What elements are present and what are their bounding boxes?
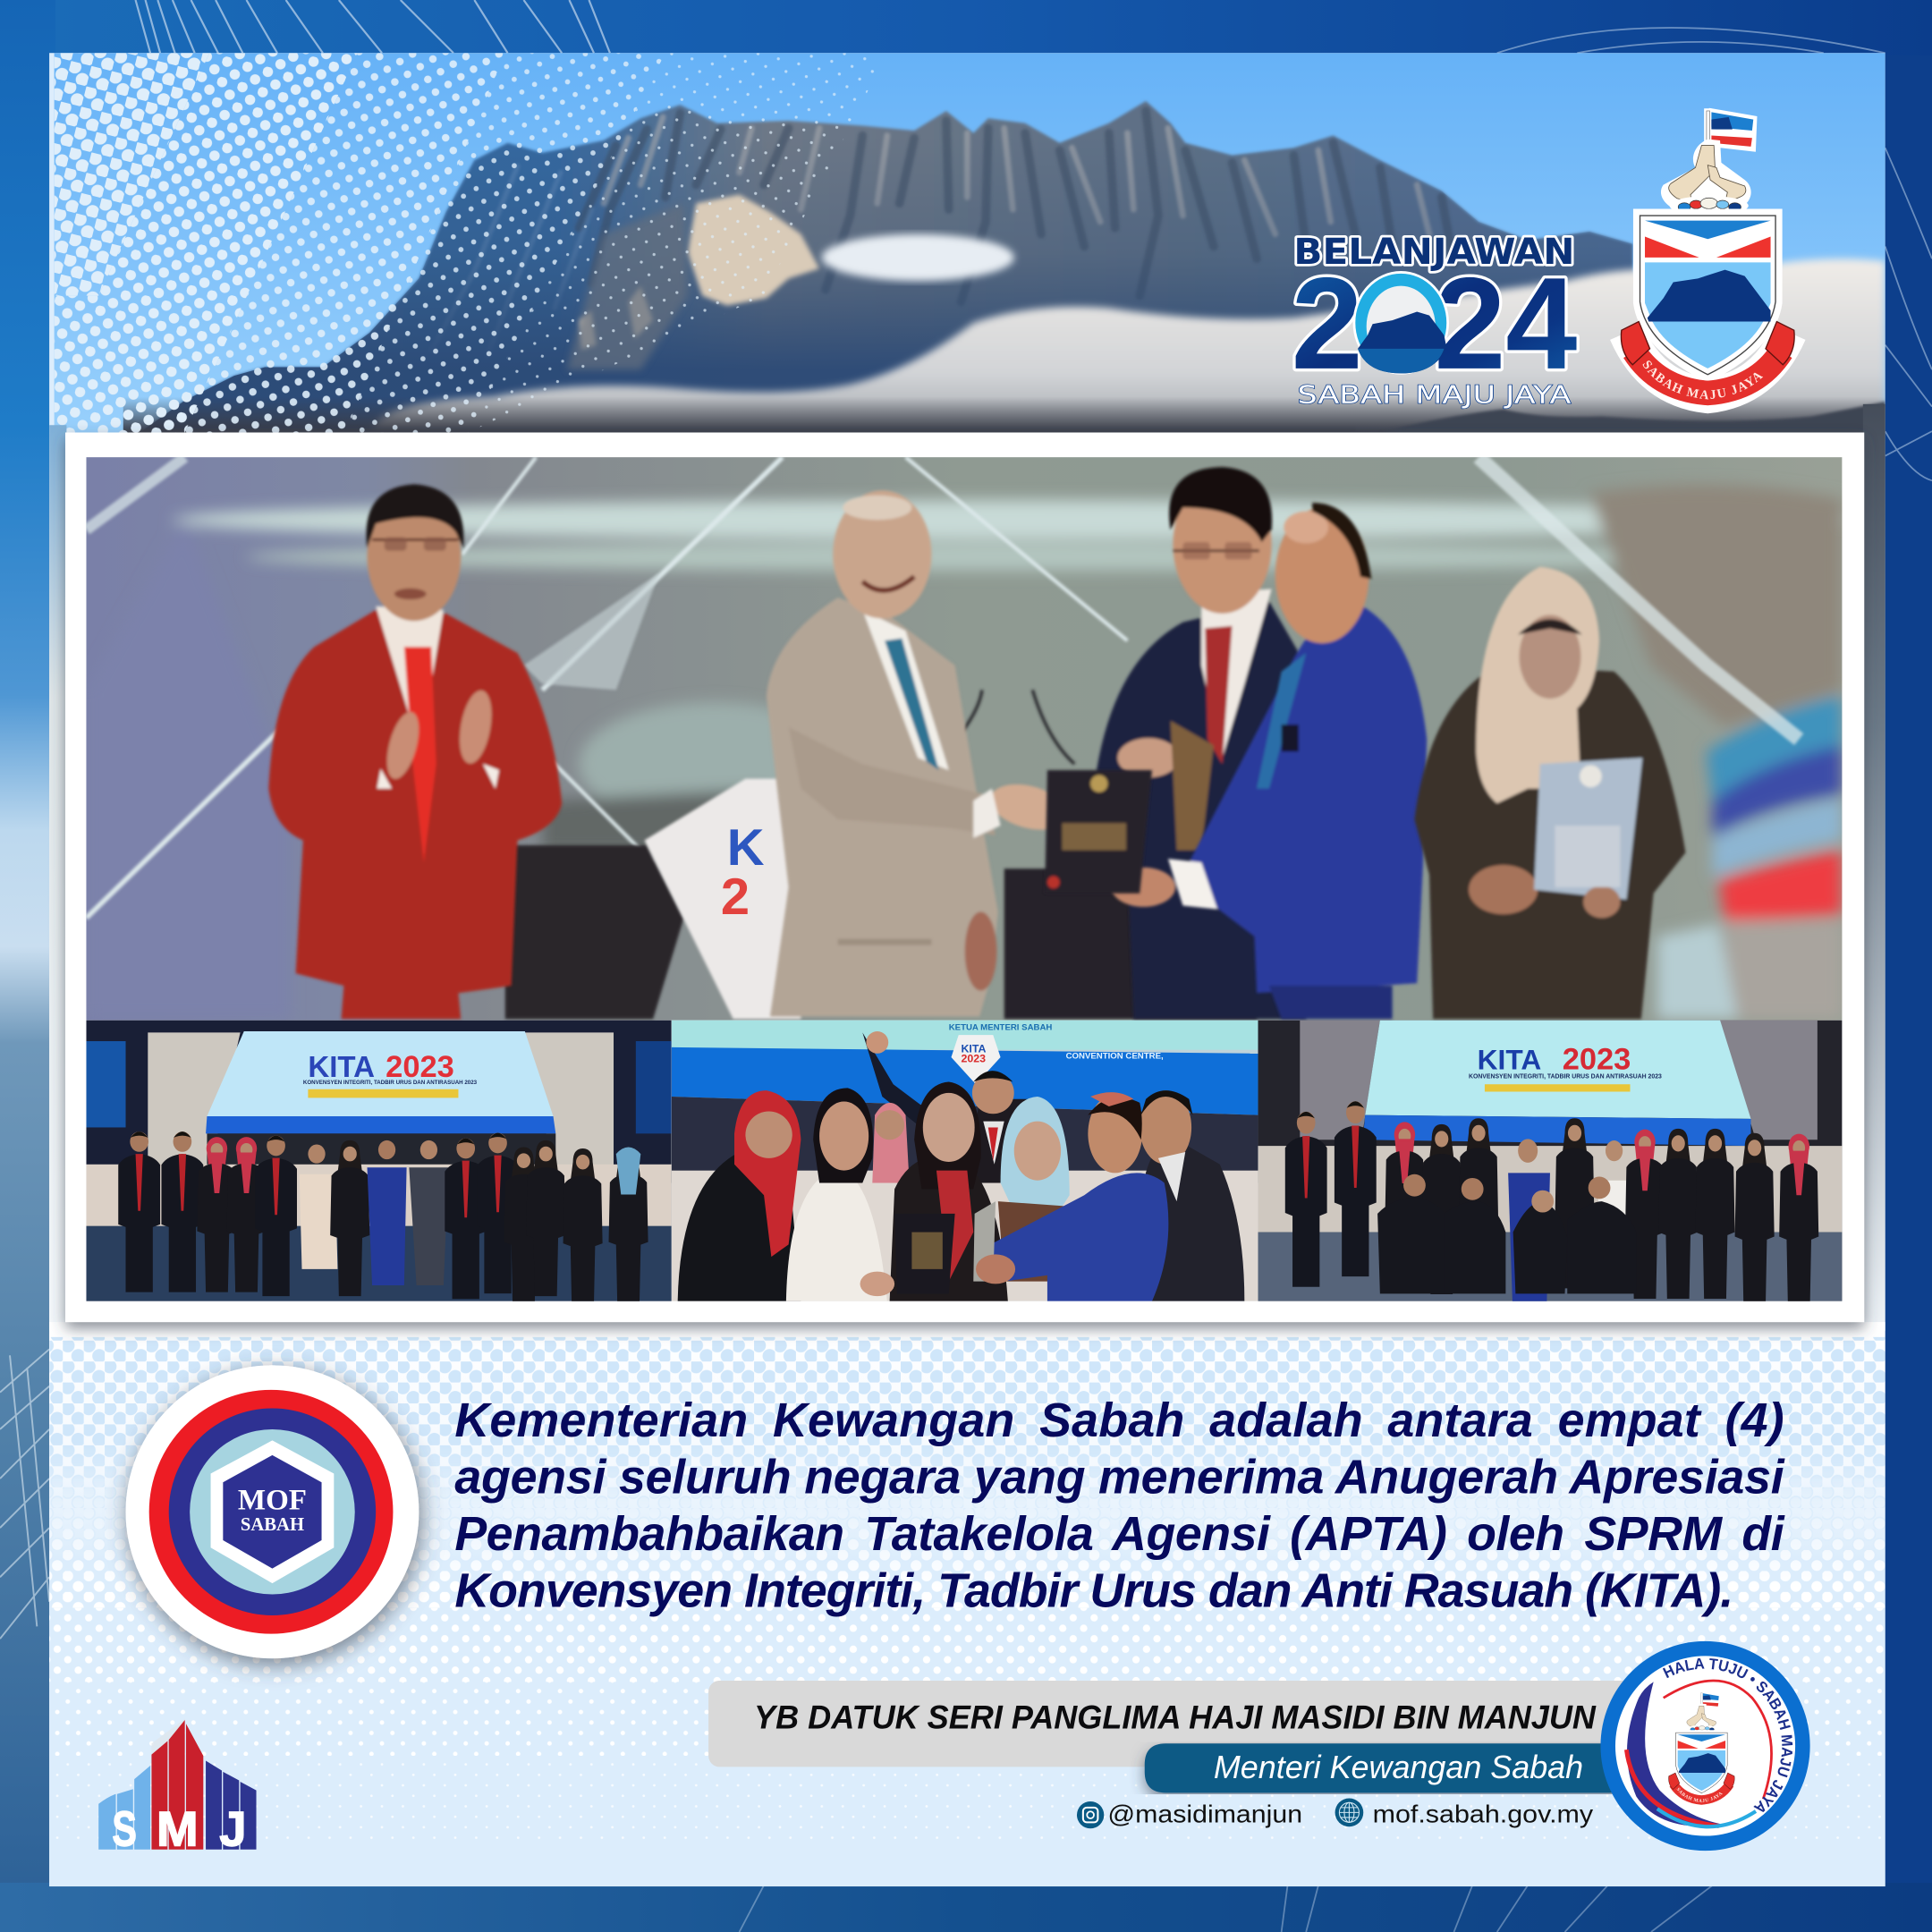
stage light beams [86,457,1799,918]
header photo: sky and Mount Kinabalu [49,53,1885,433]
person: woman in hijab [1414,567,1685,1019]
blue band [672,1047,1258,1115]
seal ring text: HALA TUJU • SABAH MAJU JAYA [1662,1658,1792,1812]
LED screen [1365,1021,1751,1119]
photo: award presentation on stage [86,457,1848,1021]
letters SMJ [112,1801,247,1857]
heading: BELANJAWAN: BELANJAWAN [1293,232,1575,273]
grey side panels [1300,1021,1818,1140]
person: man in dark suit [1097,467,1306,1019]
screen title: 2023 [386,1050,454,1084]
panel shard [523,573,659,690]
screen title: KONVENSYEN INTEGRITI, TADBIR URUS DAN ANTIRASUAH 2023 [1469,1073,1662,1080]
photo: large group on stage, right [1258,1021,1842,1321]
award plaque [1045,770,1152,894]
KITA mini sign: KITA [961,1042,987,1055]
letters SMJ: M [157,1801,199,1857]
floor [86,1165,672,1236]
screen title: 2023 [1563,1043,1631,1077]
right banner [636,1041,672,1133]
icon: MOF Sabah roundel: SABAH [241,1515,304,1535]
tagline: Sabah Maju Jaya: SABAH MAJU JAYA [1298,380,1572,409]
number: 2024: 2024 [1292,250,1577,396]
person: man in blue suit [1112,503,1427,1019]
social: website: mof.sabah.gov.my [1373,1800,1593,1827]
KITA mini sign: 2023 [961,1052,986,1064]
logo: Belanjawan 2024 [1292,232,1577,409]
person: man in red suit [268,484,562,1019]
halftone dots [55,53,887,433]
pale rock face [688,195,819,306]
logo text: MOF [238,1485,307,1517]
people close-up [678,1031,1244,1301]
screen title [1469,1043,1662,1092]
LED screen [207,1031,554,1116]
photo: close-up group with award [672,1021,1258,1301]
photo: group on stage, left [86,1021,672,1304]
stage backdrop [86,457,1848,1021]
logo: Hala Tuju Sabah Maju Jaya seal [1600,1640,1810,1852]
icon: MOF Sabah roundel [126,1365,419,1658]
text block: announcement paragraph: Konvensyen Integriti, Tadbir Urus dan Anti Rasuah (KITA). [454,1563,1733,1617]
seal crest [1669,1692,1734,1804]
role bar: Menteri Kewangan Sabah [1145,1743,1639,1792]
panel: lower background with halftone [49,1322,1885,1886]
low cloud band [123,258,1885,433]
front row crouching [1377,1174,1636,1293]
screen title [303,1050,478,1097]
screen title: KITA [308,1051,375,1084]
text block: announcement paragraph: Penambahbaikan Tatakelola Agensi (APTA) oleh SPRM di [454,1507,1785,1561]
panel: white photo frame [65,433,1864,1322]
icon: Sabah coat of arms [1621,108,1794,403]
role bar: Menteri Kewangan Sabah: Menteri Kewangan Sabah [1214,1750,1583,1785]
person: man in beige suit [767,490,1072,1016]
text block: announcement paragraph: Kementerian Kewangan Sabah adalah antara empat (4) [454,1394,1784,1447]
KITA diamond sign: 2 [721,869,750,926]
screen teal band [672,1021,1258,1050]
letters SMJ: J [219,1801,247,1857]
dark podium [505,845,684,1019]
KITA mini sign [951,1035,1001,1084]
photo: close-up group with award: CONVENTION CENTRE, [1066,1051,1164,1061]
mountain rock texture [141,105,1632,433]
back row people [1285,1101,1818,1321]
screen title: KITA [1478,1044,1541,1076]
name bar: minister name: YB DATUK SERI PANGLIMA HAJI MASIDI BIN MANJUN [754,1699,1597,1736]
KITA diamond sign: K [727,819,765,877]
letters SMJ: S [112,1801,137,1857]
side edges beside frame [49,404,1885,1331]
KITA diamond sign [644,779,801,1019]
dark stage [672,1097,1258,1182]
screen title: KONVENSYEN INTEGRITI, TADBIR URUS DAN ANTIRASUAH 2023 [303,1080,478,1086]
photo: close-up group with award: KETUA MENTERI SABAH [949,1023,1052,1033]
icon: mountain in zero [1353,271,1449,375]
floor [1258,1146,1842,1233]
social: instagram handle: @masidimanjun [1107,1800,1302,1827]
white side panels [148,1032,614,1171]
people row [118,1131,648,1304]
left banner [86,1041,126,1127]
logo: SMJ buildings [98,1719,257,1857]
text block: announcement paragraph: agensi seluruh negara yang menerima Anugerah Apresiasi [454,1451,1785,1504]
name bar: minister name [708,1681,1645,1767]
text block: announcement paragraph [454,1394,1785,1617]
drifting cloud [822,234,1014,281]
mountain silhouette [141,101,1632,431]
